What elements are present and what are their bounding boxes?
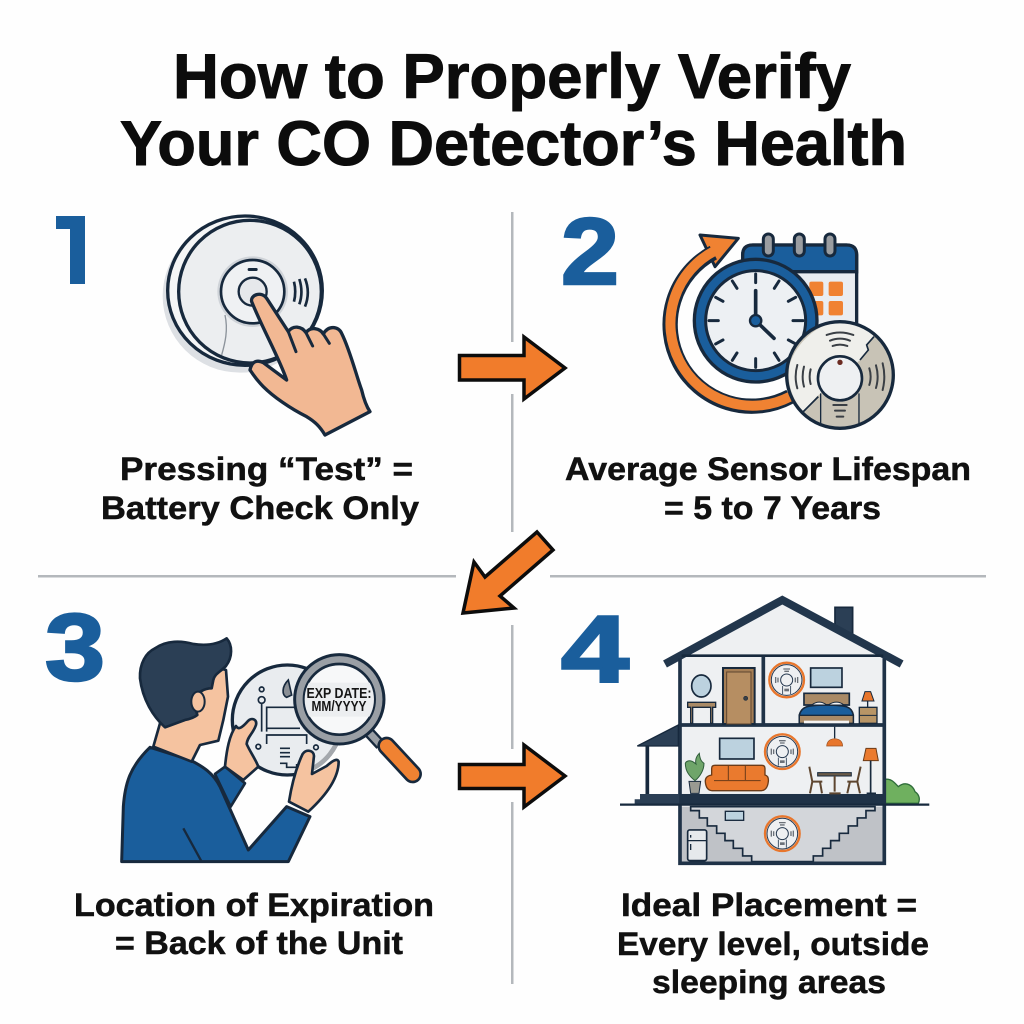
icon: clock, calendar and detector	[670, 234, 893, 428]
icon: house cross-section with detectors	[620, 600, 929, 863]
arrow: step 2 to step 3	[463, 532, 553, 613]
step number 4: 4	[561, 597, 629, 703]
caption: step 3: = Back of the Unit	[115, 925, 403, 961]
title: Your CO Detector’s Health	[120, 109, 907, 179]
arrow: step 1 to step 2	[460, 337, 565, 399]
panel: step 2	[561, 199, 971, 526]
roof	[665, 600, 902, 664]
caption: step 1: Pressing “Test” =	[120, 451, 413, 487]
caption: step 4	[617, 887, 929, 1000]
panel: step 4	[561, 597, 929, 1000]
porch	[637, 725, 678, 746]
upper left furniture	[692, 675, 711, 697]
step number 3: 3	[45, 595, 105, 701]
icon: finger pressing detector test button	[163, 216, 370, 435]
arrow: step 3 to step 4	[460, 745, 565, 807]
bedroom	[811, 668, 842, 687]
fridge and basement vent	[688, 830, 707, 861]
caption: step 4: sleeping areas	[652, 964, 886, 1000]
caption: step 2: Average Sensor Lifespan	[565, 451, 971, 487]
panel: step 1	[50, 199, 419, 526]
walls and floors	[680, 657, 884, 863]
icon: man inspecting back of detector with magnifier	[122, 638, 413, 862]
bush	[885, 779, 919, 803]
detector back	[232, 665, 342, 775]
shirt	[122, 747, 310, 862]
caption: step 2	[565, 451, 971, 526]
hands	[225, 719, 258, 780]
title	[120, 42, 907, 179]
magnifier label: MM/YYYY	[312, 699, 367, 715]
chimney	[835, 607, 853, 636]
step number 1: 1	[50, 199, 103, 305]
head	[153, 667, 228, 762]
clock	[694, 259, 817, 382]
caption: step 1	[101, 451, 419, 526]
caption: step 3: Location of Expiration	[74, 887, 434, 923]
magnifier label: EXP DATE:	[306, 686, 372, 702]
title: How to Properly Verify	[173, 42, 851, 112]
panel: step 3	[45, 595, 434, 961]
step number 1	[56, 216, 85, 284]
detector markers	[769, 663, 804, 697]
attic and rooms	[680, 603, 884, 807]
living room	[720, 738, 754, 759]
caption: step 3	[74, 887, 434, 961]
magnifier	[295, 655, 413, 774]
caption: step 4: Ideal Placement =	[621, 887, 917, 923]
caption: step 2: = 5 to 7 Years	[664, 490, 881, 526]
step number 2: 2	[561, 199, 619, 305]
basement stairs	[691, 807, 875, 862]
circular arrow	[670, 235, 790, 406]
calendar	[743, 234, 857, 335]
worn detector	[787, 322, 893, 428]
hair	[140, 638, 231, 727]
grid dividers	[38, 212, 986, 984]
magnifier label	[306, 686, 372, 715]
caption: step 4: Every level, outside	[617, 926, 929, 962]
caption: step 1: Battery Check Only	[101, 490, 419, 526]
